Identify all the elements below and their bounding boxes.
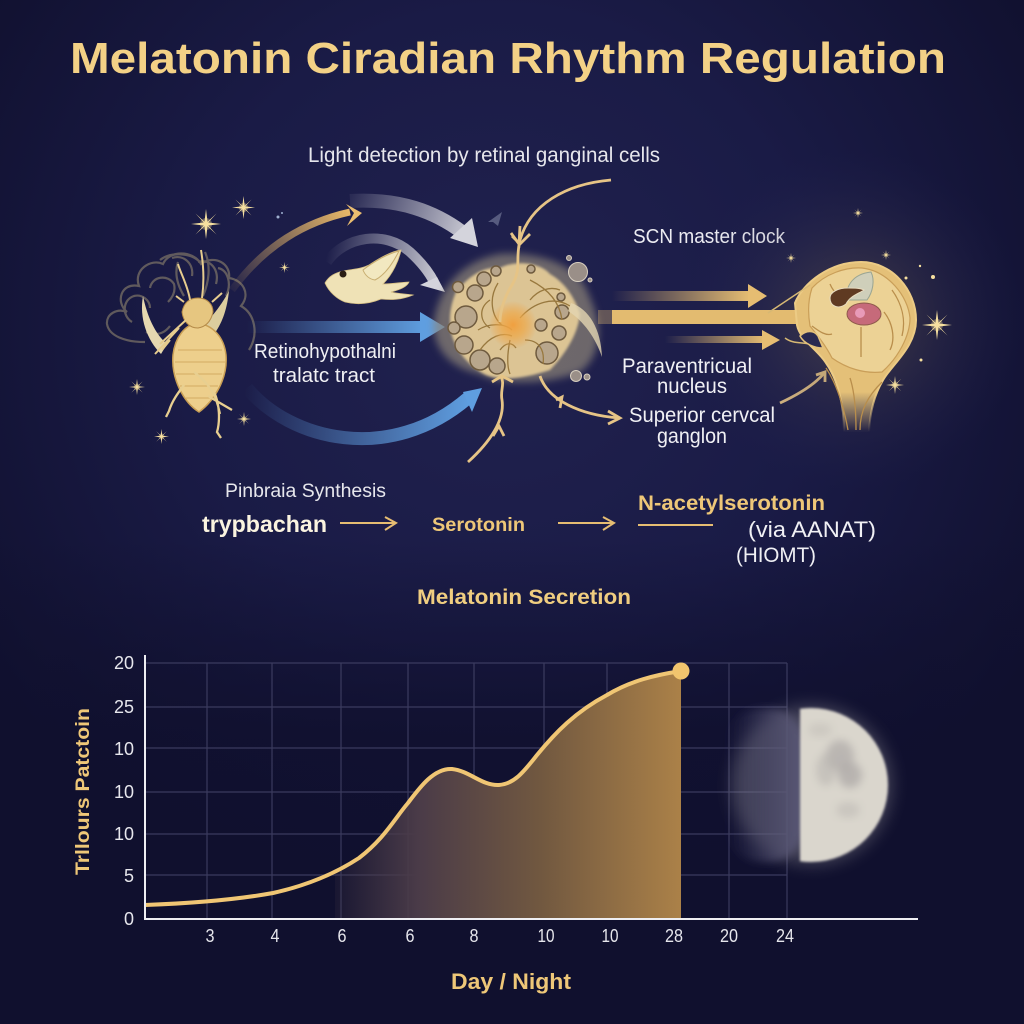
x axis labels: 28: [665, 926, 683, 946]
label: SCN master clock: SCN master clock: [633, 226, 786, 248]
label: paraventricular nucleus: [622, 355, 752, 398]
area under curve: [335, 671, 681, 918]
heading: melatonin secretion: Melatonin Secretion: [417, 586, 631, 609]
arrow: gold curved: [232, 204, 362, 290]
label: pineal synthesis: Pinbraia Synthesis: [225, 481, 386, 502]
x axis labels: [206, 926, 794, 946]
pathway: serotonin: Serotonin: [432, 515, 525, 536]
icon: brain in head profile: [768, 262, 916, 432]
icon: fish creature: [325, 250, 413, 304]
x axis labels: 24: [776, 926, 794, 946]
y axis labels: 5: [124, 866, 134, 886]
arrow: pathway one: [340, 517, 396, 530]
y axis labels: 25: [114, 697, 134, 717]
pathway: N-acetylserotonin: N-acetylserotonin: [638, 492, 825, 515]
label: HIOMT: (HIOMT): [736, 544, 816, 567]
label: via AANAT: (via AANAT): [748, 517, 876, 542]
label: paraventricular nucleus: Paraventricual: [622, 355, 752, 378]
melatonin curve line: [145, 671, 681, 905]
x axis labels: 10: [538, 926, 554, 946]
peak marker: [672, 662, 690, 680]
x axis labels: 6: [338, 926, 346, 946]
y axis title: Trllours Patctoin: [73, 708, 94, 875]
arrow: pathway two: [558, 517, 614, 530]
label: superior cervical ganglion: [629, 404, 775, 448]
y axis labels: 10: [114, 782, 134, 802]
x axis labels: 3: [206, 926, 214, 946]
x axis labels: 4: [270, 926, 280, 946]
label: light detection: Light detection by retinal ganginal cells: [308, 144, 660, 167]
arrow: gray curved outer: [350, 201, 478, 247]
y axis labels: 0: [124, 909, 134, 929]
small star shape: [488, 212, 502, 226]
y axis labels: 10: [114, 739, 134, 759]
icon: insect with swirling antennae: [107, 250, 255, 438]
icon: half moon: [725, 705, 892, 865]
y axis labels: 10: [114, 824, 134, 844]
pathway: tryptophan: trypbachan: [202, 511, 327, 537]
chart: melatonin secretion curve: [145, 655, 918, 919]
label: retinohypothalamic tract: Retinohypothalni: [254, 341, 396, 363]
arrow: blue curved lower: [247, 388, 482, 439]
icon: SCN cell cluster: [434, 254, 602, 382]
sparkles around head: [786, 208, 952, 394]
nerve fibres around SCN: [468, 180, 825, 462]
label: retinohypothalamic tract: [254, 341, 396, 387]
y axis labels: [114, 653, 134, 929]
x axis labels: 8: [470, 926, 478, 946]
label: superior cervical ganglion: ganglon: [657, 425, 727, 448]
arrow: gray curved inner: [327, 239, 445, 292]
label: retinohypothalamic tract: tralatc tract: [273, 365, 375, 387]
y axis labels: 20: [114, 653, 134, 673]
sparkles around insect: [129, 196, 290, 444]
arrows: golden parallel to brain: [598, 284, 802, 350]
axes: [145, 655, 918, 919]
x axis title: Day / Night: [451, 969, 572, 994]
label: superior cervical ganglion: Superior cervcal: [629, 404, 775, 427]
arrow: blue straight: [247, 312, 445, 342]
x axis labels: 20: [720, 926, 738, 946]
head glow: [685, 150, 1024, 490]
title: Melatonin Ciradian Rhythm Regulation: [70, 34, 946, 83]
label: paraventricular nucleus: nucleus: [657, 375, 727, 398]
x axis labels: 6: [406, 926, 414, 946]
x axis labels: 10: [602, 926, 618, 946]
